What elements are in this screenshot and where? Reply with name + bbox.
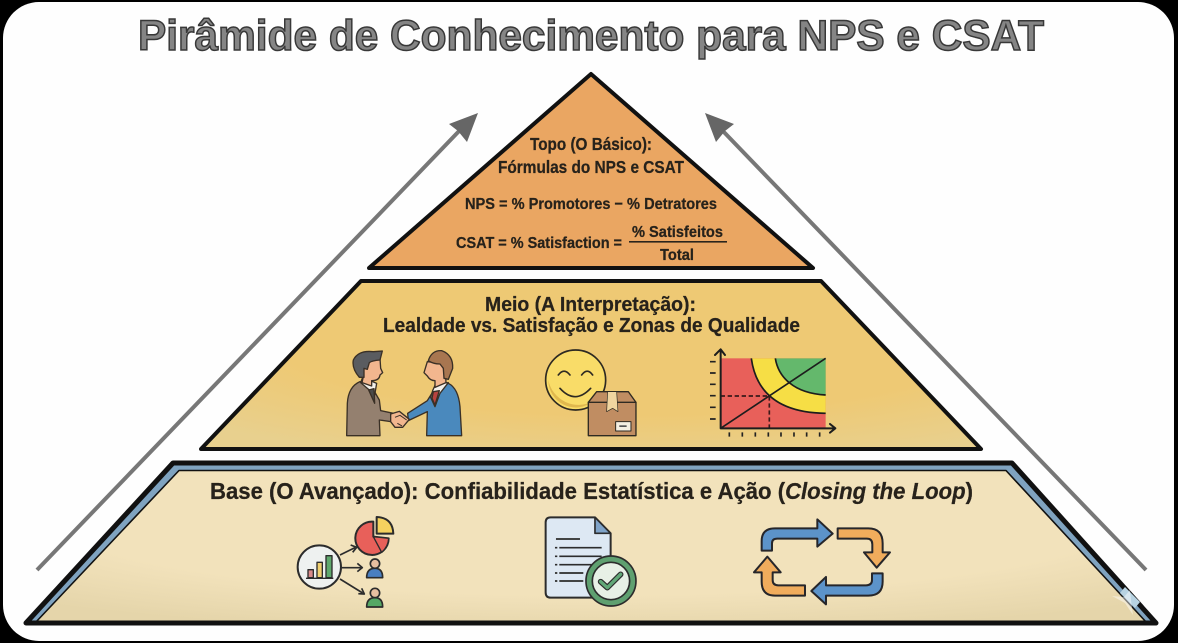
icon: smiley with box (546, 350, 636, 436)
heading: middle tier (383, 294, 800, 337)
text: NPS formula: NPS = % Promotores − % Detratores (465, 196, 717, 213)
icon: analysis to segments (298, 517, 393, 607)
title: Pirâmide de Conhecimento para NPS e CSAT (138, 12, 1044, 60)
icon: checked document (546, 517, 636, 606)
heading: top tier (498, 134, 684, 177)
text: CSAT formula: Total (660, 247, 694, 264)
panel: top tier (369, 74, 813, 268)
text: CSAT formula: % Satisfeitos (632, 224, 723, 241)
text: watermark glint (1112, 587, 1140, 615)
heading: top tier: Fórmulas do NPS e CSAT (498, 157, 684, 177)
chart: quality zones (710, 349, 835, 437)
icon: closed loop arrows (754, 519, 890, 604)
heading: top tier: Topo (O Básico): (530, 134, 652, 154)
panel: base tier (26, 463, 1156, 623)
icon: handshake (347, 351, 462, 436)
panel: middle tier (201, 281, 981, 449)
heading: base tier: Base (O Avançado): Confiabilidade Estatística e Ação (Closing the Loop) (210, 478, 973, 504)
arrow: left upward (37, 113, 478, 570)
text: CSAT formula: CSAT = % Satisfaction = (456, 235, 622, 252)
arrow: right upward (705, 113, 1146, 570)
heading: middle tier: Lealdade vs. Satisfação e Zonas de Qualidade (383, 315, 800, 337)
heading: middle tier: Meio (A Interpretação): (485, 294, 696, 316)
text: CSAT formula (456, 224, 727, 264)
